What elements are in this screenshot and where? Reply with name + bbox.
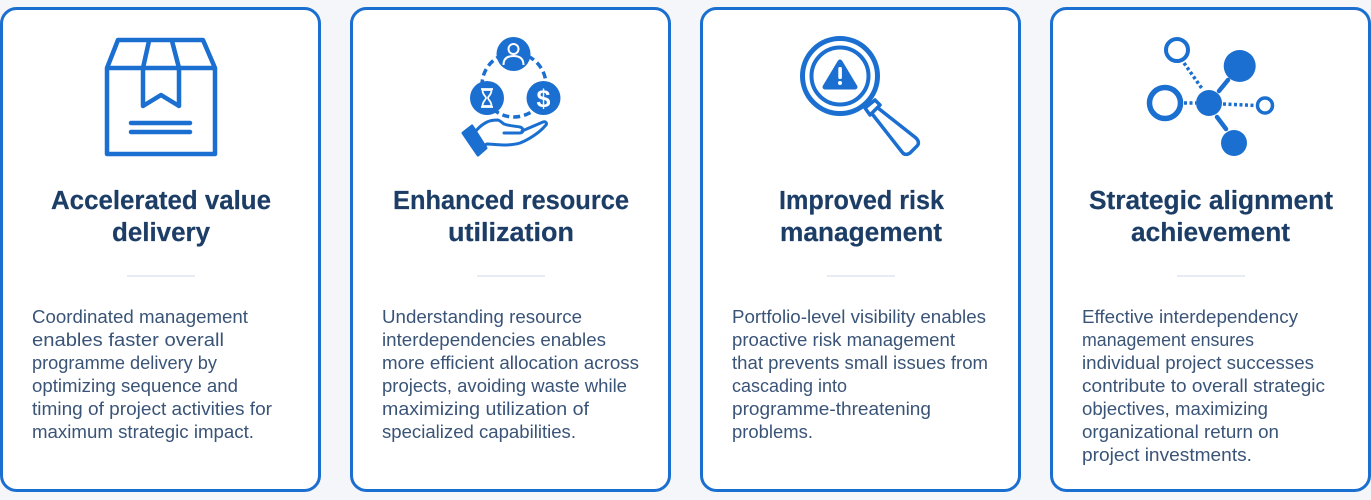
heading: Improved risk	[779, 187, 945, 215]
body text	[32, 306, 272, 442]
body text: Understanding resource	[382, 306, 582, 327]
body text: specialized capabilities.	[382, 421, 576, 442]
icon: resources in hand	[463, 37, 560, 155]
icon: magnifier with warning	[802, 38, 918, 154]
heading	[51, 187, 271, 247]
heading: Enhanced resource	[393, 187, 629, 215]
body text: management ensures	[1082, 329, 1254, 350]
body text: contribute to overall strategic	[1082, 375, 1325, 396]
heading: management	[780, 219, 943, 247]
body text: cascading into	[732, 375, 847, 396]
heading	[779, 187, 945, 247]
body text: more efficient allocation across	[382, 352, 639, 373]
body text: proactive risk management	[732, 329, 955, 350]
icon: parcel box	[107, 40, 215, 154]
heading	[1089, 187, 1334, 247]
body text: projects, avoiding waste while	[382, 375, 627, 396]
body text: Portfolio-level visibility enables	[732, 306, 986, 327]
body text	[1082, 306, 1325, 465]
body text: that prevents small issues from	[732, 352, 988, 373]
body text: maximum strategic impact.	[32, 421, 254, 442]
icon: network nodes	[1150, 39, 1272, 156]
body text: Effective interdependency	[1082, 306, 1299, 327]
body text: project investments.	[1082, 444, 1252, 465]
body text: optimizing sequence and	[32, 375, 238, 396]
heading	[393, 187, 629, 247]
body text: organizational return on	[1082, 421, 1279, 442]
body text: programme delivery by	[32, 352, 218, 373]
heading: Accelerated value	[51, 187, 271, 215]
icon: resources in hand: $	[537, 85, 551, 113]
heading: achievement	[1131, 219, 1291, 247]
body text: maximizing utilization of	[382, 398, 590, 419]
body text: Coordinated management	[32, 306, 248, 327]
panel: improved risk management	[702, 8, 1020, 490]
body text	[382, 306, 639, 442]
heading: delivery	[112, 219, 211, 247]
heading: utilization	[448, 219, 574, 247]
heading: Strategic alignment	[1089, 187, 1334, 215]
body text: individual project successes	[1082, 352, 1314, 373]
body text: enables faster overall	[32, 329, 224, 350]
body text: objectives, maximizing	[1082, 398, 1268, 419]
body text	[732, 306, 988, 442]
body text: problems.	[732, 421, 813, 442]
panel: strategic alignment achievement	[1052, 8, 1370, 490]
body text: programme-threatening	[732, 398, 931, 419]
panel: enhanced resource utilization	[352, 8, 670, 490]
body text: interdependencies enables	[382, 329, 606, 350]
body text: timing of project activities for	[32, 398, 272, 419]
panel: accelerated value delivery	[2, 8, 320, 490]
